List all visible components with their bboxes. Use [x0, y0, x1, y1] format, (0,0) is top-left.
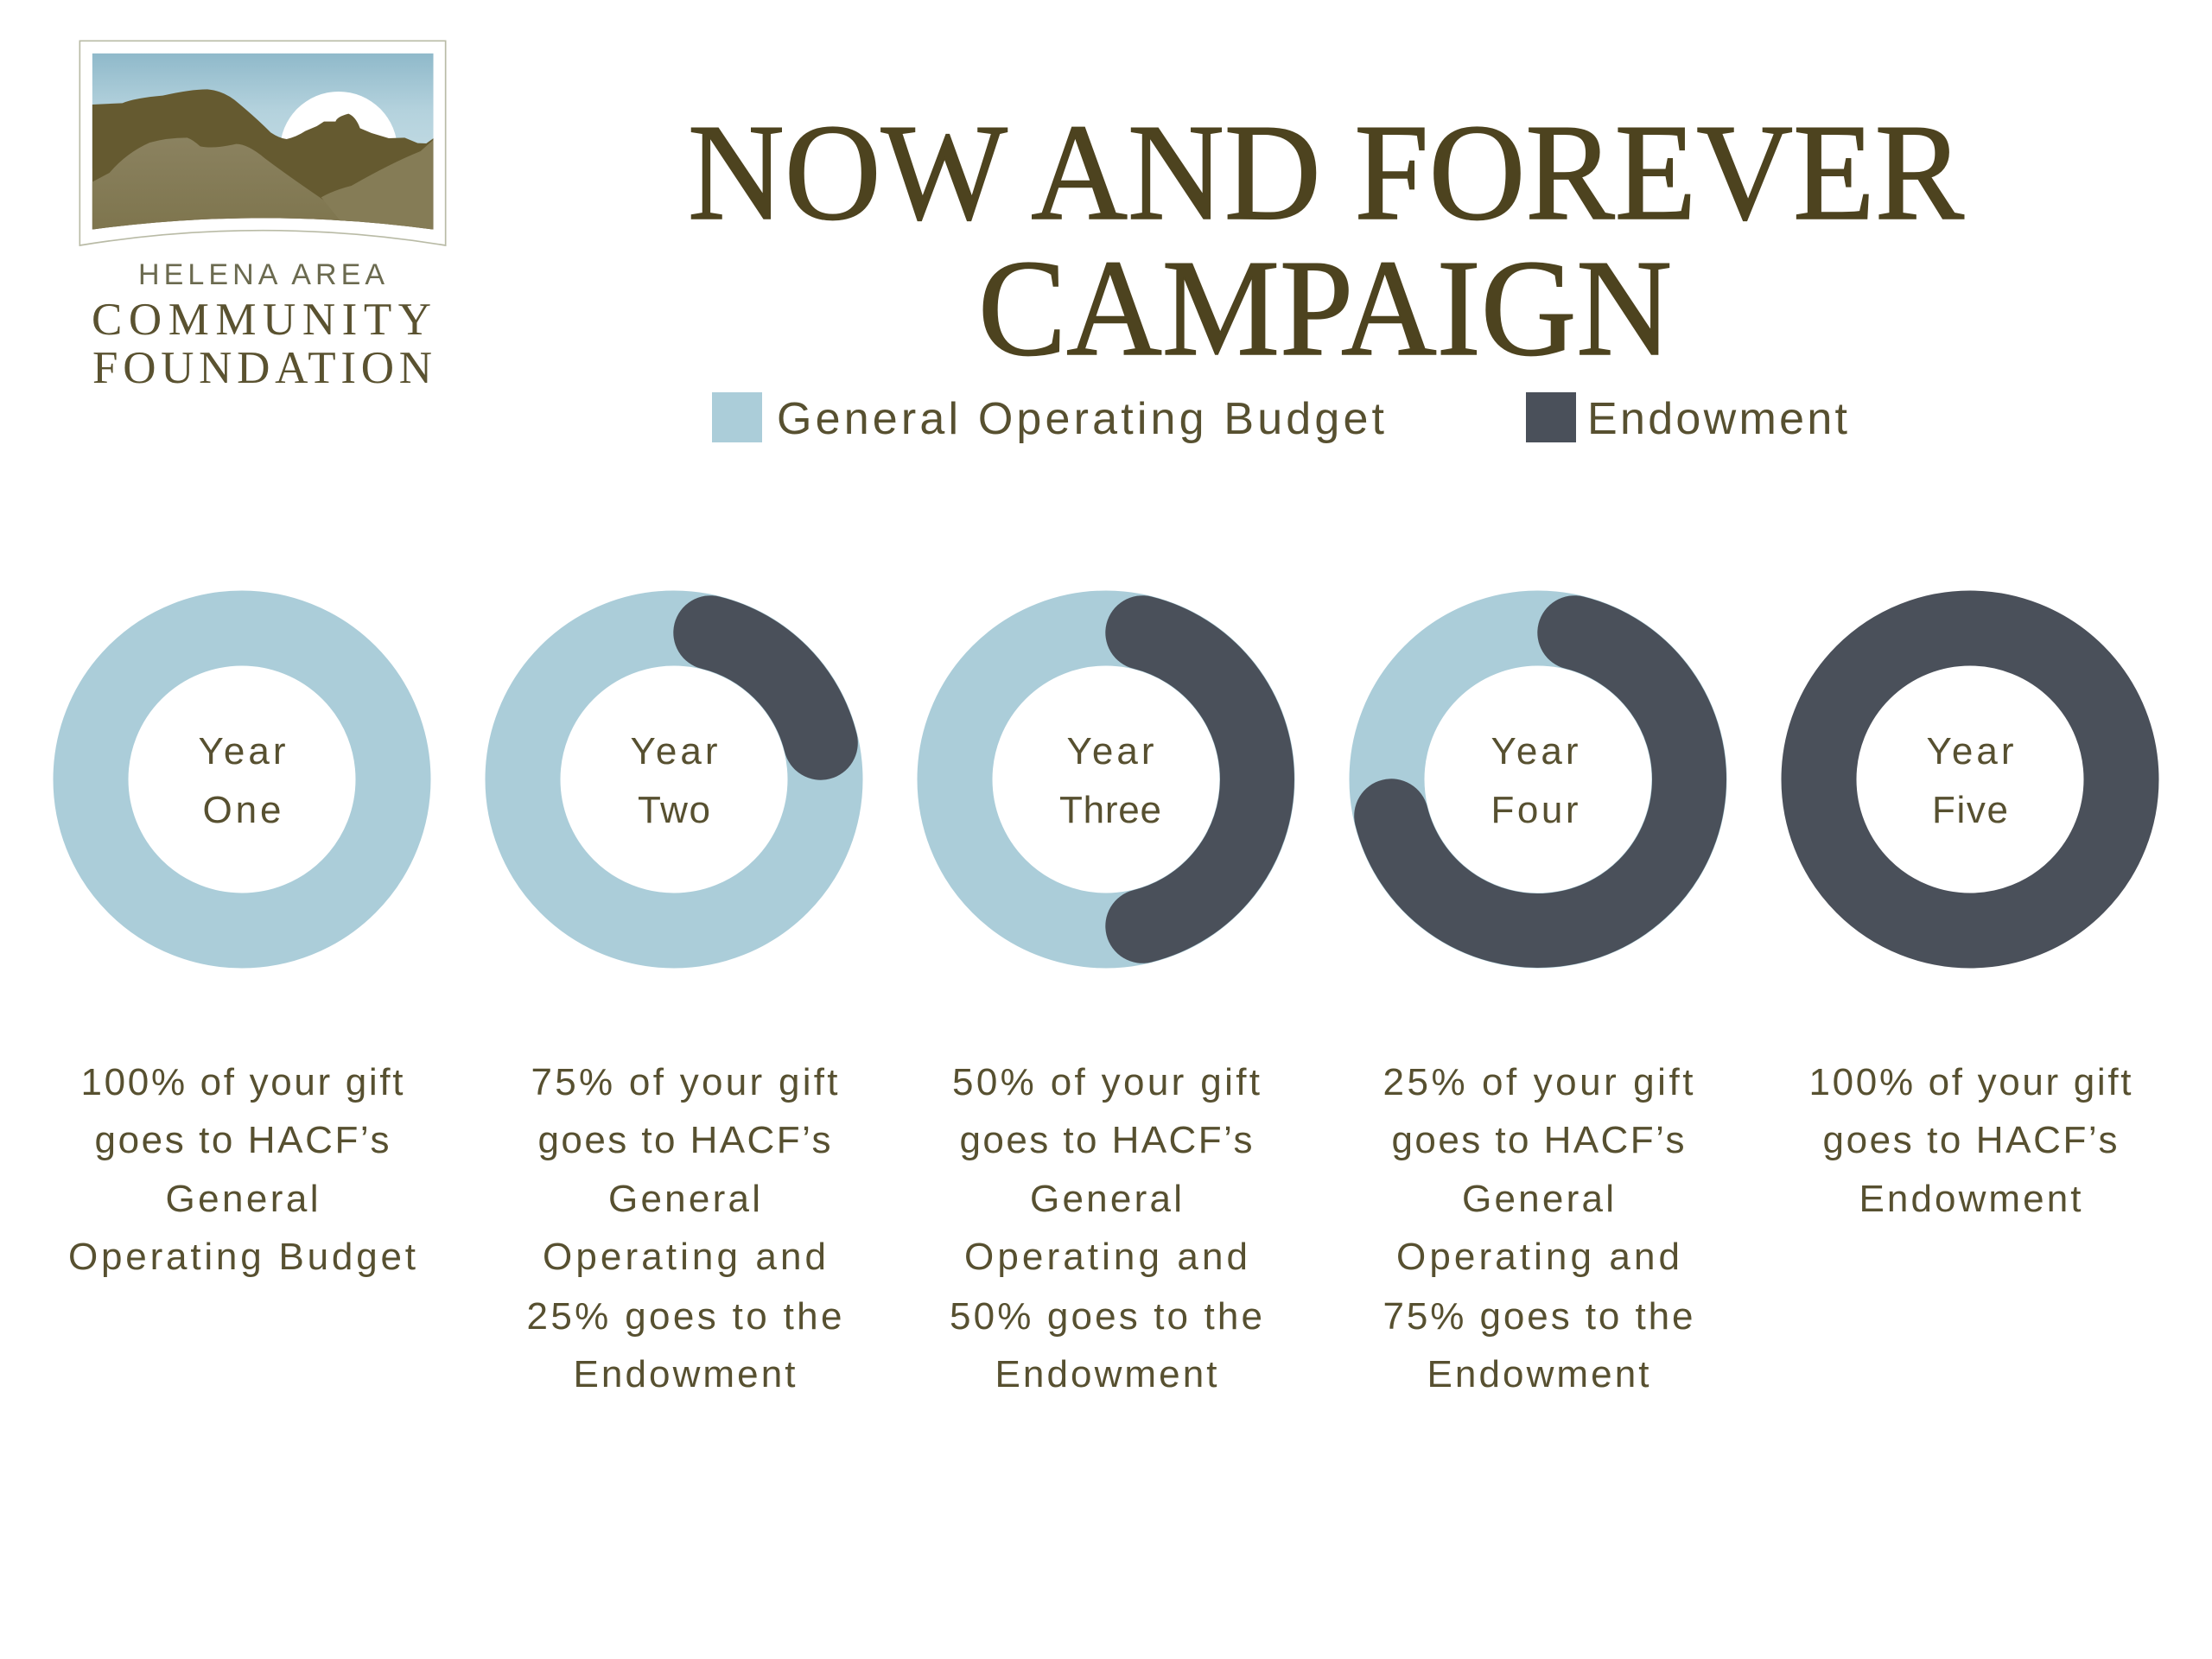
logo text: Community: COMMUNITY — [92, 295, 431, 345]
donut label: year two — [631, 730, 717, 831]
description: year four: Endowment — [1427, 1353, 1649, 1395]
donut chart: year four, 75 percent endowment — [1387, 628, 1689, 931]
description: year two: Endowment — [574, 1353, 795, 1395]
title: CAMPAIGN — [978, 231, 1672, 385]
logo text: Helena Area: HELENA AREA — [138, 258, 385, 291]
donut chart: year one — [91, 628, 393, 931]
donut label: year three — [1059, 730, 1161, 831]
donut label: year two: Year — [631, 730, 717, 772]
donut label: year three: Three — [1059, 789, 1161, 831]
logo emblem: mountains and sun — [79, 41, 446, 245]
donut chart: year two, 25 percent endowment — [523, 628, 825, 931]
description: year four: General — [1462, 1178, 1614, 1220]
title: NOW AND FOREVER — [688, 95, 1964, 249]
donut label: year three: Year — [1066, 730, 1154, 772]
description: year three: Operating and — [964, 1236, 1248, 1278]
donut label: year four: Four — [1491, 789, 1578, 831]
donut label: year one — [199, 730, 285, 831]
description: year three: 50% goes to the — [950, 1295, 1262, 1338]
description: year five — [1809, 1061, 2131, 1220]
legend swatch: general operating budget — [712, 392, 762, 442]
panel: year one — [68, 628, 416, 1278]
donut label: year four: Year — [1491, 730, 1578, 772]
donut label: year five — [1927, 730, 2013, 831]
donut chart: year three, 50 percent endowment — [955, 628, 1257, 931]
description: year three: goes to HACF’s — [959, 1119, 1253, 1161]
panel: year three — [950, 628, 1262, 1395]
description: year two: 25% goes to the — [527, 1295, 842, 1338]
panel: year five — [1809, 628, 2131, 1220]
legend label: general operating budget: General Operating Budget — [777, 394, 1385, 444]
legend — [712, 392, 1848, 444]
donut label: year five: Year — [1927, 730, 2013, 772]
description: year two — [527, 1061, 842, 1395]
description: year four — [1382, 1061, 1694, 1395]
panel: year four — [1382, 628, 1694, 1395]
description: year four: 75% goes to the — [1382, 1295, 1694, 1338]
panel: year two — [523, 628, 842, 1395]
description: year three: Endowment — [995, 1353, 1217, 1395]
donut label: year four — [1491, 730, 1578, 831]
logo text: Foundation: FOUNDATION — [92, 343, 432, 393]
legend swatch: endowment — [1526, 392, 1576, 442]
donut label: year two: Two — [638, 789, 710, 831]
description: year one: General — [166, 1178, 318, 1220]
description: year five: goes to HACF’s — [1823, 1119, 2117, 1161]
description: year five: Endowment — [1859, 1178, 2081, 1220]
donut chart: year five — [1819, 628, 2121, 931]
description: year four: 25% of your gift — [1382, 1061, 1694, 1103]
description: year two: goes to HACF’s — [537, 1119, 831, 1161]
description: year four: goes to HACF’s — [1391, 1119, 1685, 1161]
donut label: year five: Five — [1932, 789, 2008, 831]
description: year one: 100% of your gift — [81, 1061, 403, 1103]
legend label: endowment: Endowment — [1587, 394, 1848, 444]
description: year three — [950, 1061, 1262, 1395]
title — [688, 95, 1964, 385]
description: year five: 100% of your gift — [1809, 1061, 2131, 1103]
donut label: year one: Year — [199, 730, 285, 772]
description: year one: Operating Budget — [68, 1236, 416, 1278]
donut label: year one: One — [202, 789, 282, 831]
description: year two: 75% of your gift — [531, 1061, 838, 1103]
description: year two: General — [608, 1178, 760, 1220]
description: year three: General — [1030, 1178, 1182, 1220]
description: year three: 50% of your gift — [952, 1061, 1260, 1103]
description: year two: Operating and — [543, 1236, 826, 1278]
logo: Helena Area Community Foundation — [79, 41, 446, 393]
description: year one: goes to HACF’s — [95, 1119, 389, 1161]
description: year one — [68, 1061, 416, 1278]
description: year four: Operating and — [1396, 1236, 1680, 1278]
